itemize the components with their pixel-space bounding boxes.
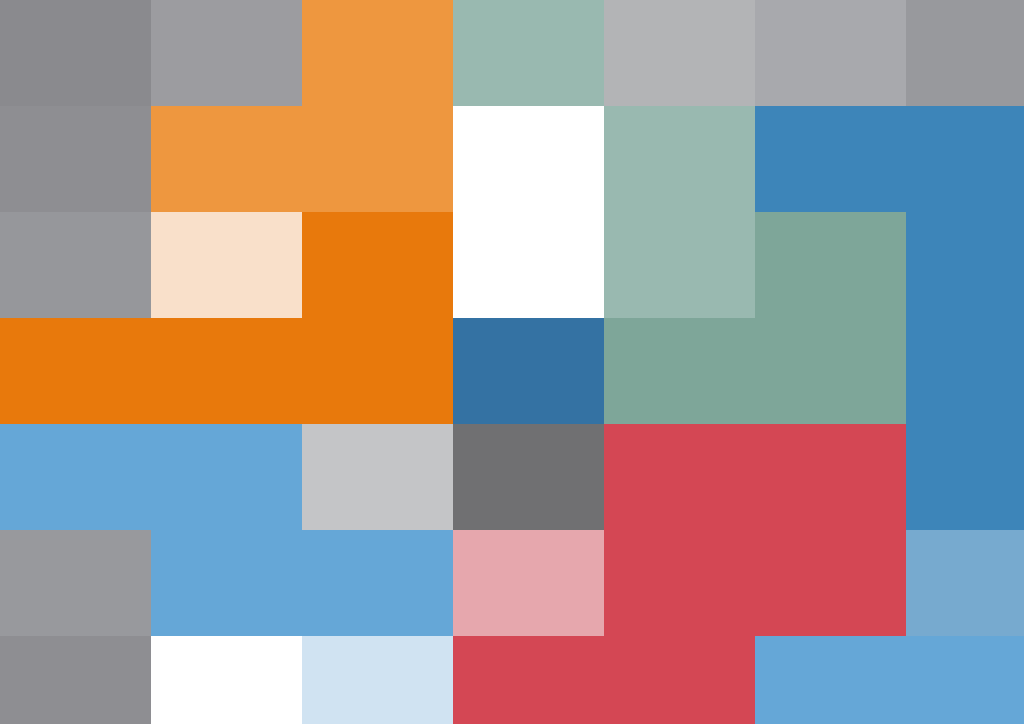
- row 1 blocks: [0, 0, 151, 106]
